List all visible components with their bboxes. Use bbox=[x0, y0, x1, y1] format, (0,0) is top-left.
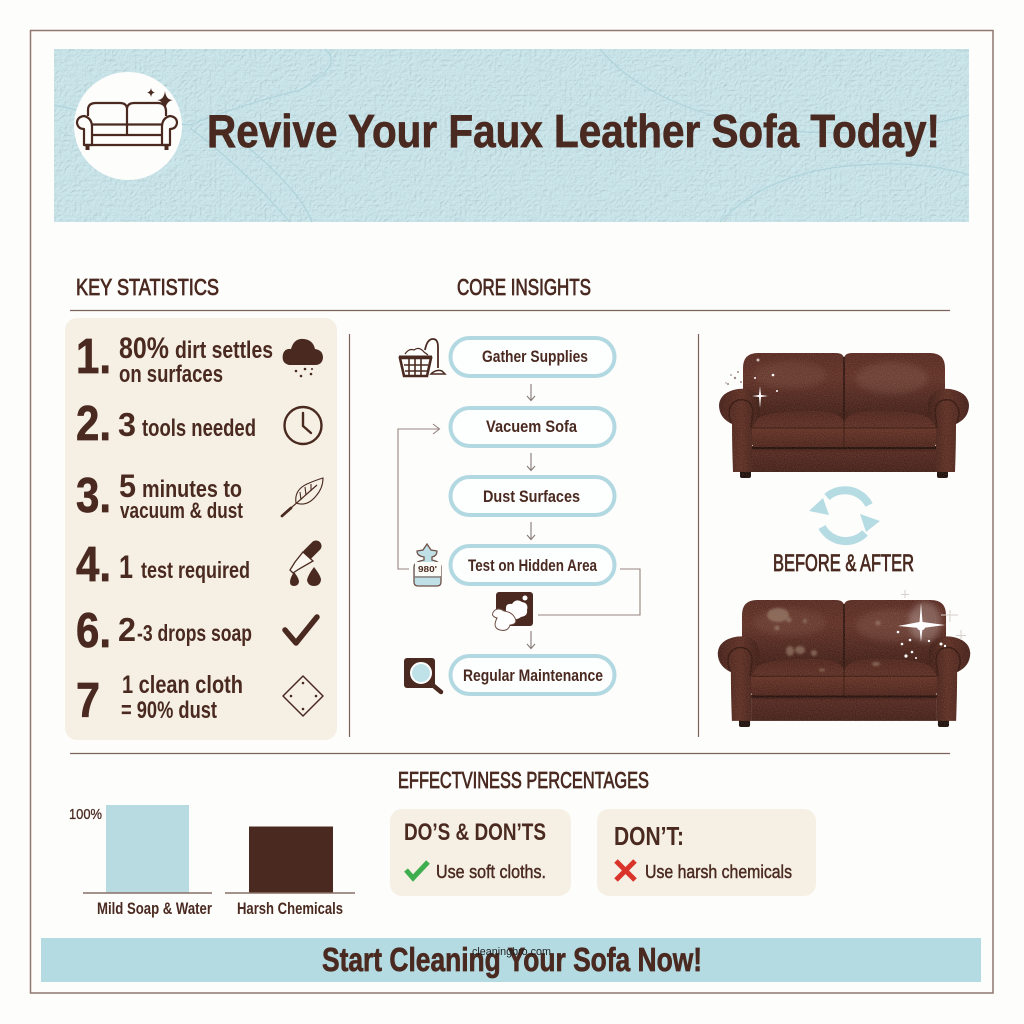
stat 2 bbox=[76, 397, 256, 451]
don't heading: DON’T: bbox=[614, 821, 684, 851]
step: dust surfaces: Dust Surfaces bbox=[483, 487, 580, 506]
panel background bbox=[65, 318, 337, 740]
icon: cleaning cloth bbox=[283, 676, 323, 716]
icon: dust cloud bbox=[283, 339, 323, 377]
icon: red cross bbox=[616, 861, 635, 880]
label: before and after: BEFORE & AFTER bbox=[773, 550, 914, 577]
panel: do's bbox=[390, 809, 571, 896]
heading: core insights: CORE INSIGHTS bbox=[457, 274, 591, 300]
stat 4 bbox=[76, 538, 250, 592]
value label: 100% bbox=[69, 807, 102, 823]
step: gather supplies bbox=[450, 338, 614, 376]
stat 1: 1. bbox=[76, 330, 111, 384]
do's heading: DO’S & DON’TS bbox=[404, 819, 546, 846]
category label: mild soap: Mild Soap & Water bbox=[97, 899, 212, 918]
call to action text: Start Cleaning Your Sofa Now! bbox=[322, 941, 702, 978]
axis lines bbox=[83, 892, 355, 894]
stat 3: 3. bbox=[76, 469, 111, 523]
sparkle dust bbox=[725, 358, 778, 408]
stat 4: 4. bbox=[76, 538, 111, 592]
leather texture band bbox=[54, 49, 969, 222]
stat 3 bbox=[76, 468, 244, 523]
icon: basket and vacuum bbox=[399, 339, 445, 376]
watermark: cleaningbro.com bbox=[472, 946, 551, 958]
icon: soap bottle bbox=[414, 544, 441, 586]
step: test on hidden area bbox=[450, 546, 614, 584]
stat 6: -3 drops soap bbox=[137, 620, 252, 646]
heading: key statistics: KEY STATISTICS bbox=[76, 274, 219, 300]
stat 4: 1 bbox=[119, 549, 133, 585]
panel: key statistics bbox=[65, 318, 337, 740]
icon: sofa with sparkle bbox=[77, 88, 177, 150]
icon: feather bbox=[282, 478, 323, 516]
stat 1 bbox=[76, 330, 273, 388]
icon: magnifying glass bbox=[404, 658, 441, 692]
header banner bbox=[54, 49, 969, 222]
stat 3: 5 bbox=[119, 468, 136, 504]
icon: refresh arrows bbox=[809, 490, 880, 541]
icon: dropper bbox=[290, 546, 321, 586]
stat 7: 7 bbox=[76, 674, 100, 728]
stat 6: 2 bbox=[118, 611, 136, 648]
photo: dusty sofa bbox=[718, 590, 970, 727]
stat 1: dirt settles bbox=[175, 337, 273, 364]
flowchart: core insights bbox=[398, 338, 640, 694]
stat 7 bbox=[76, 671, 243, 728]
title: Revive Your Faux Leather Sofa Today! bbox=[207, 105, 940, 157]
panel: don'ts bbox=[597, 809, 816, 896]
heading: effectiveness percentages: EFFECTVINESS PERCENTAGES bbox=[398, 767, 649, 793]
photo: clean sofa bbox=[719, 353, 969, 478]
stat 2: tools needed bbox=[142, 415, 256, 442]
stat 2: 2. bbox=[76, 397, 111, 451]
feedback loop arrows bbox=[398, 424, 640, 615]
call to action banner bbox=[41, 938, 981, 982]
bar: harsh chemicals bbox=[249, 826, 333, 893]
stat 2: 3 bbox=[118, 406, 136, 443]
step: gather supplies: Gather Supplies bbox=[482, 347, 588, 366]
sparkle bbox=[897, 602, 946, 659]
stat 3: vacuum & dust bbox=[120, 498, 244, 523]
stat 7: = 90% dust bbox=[121, 697, 217, 724]
stat 6: 6. bbox=[76, 604, 111, 658]
icon: clock bbox=[284, 407, 322, 444]
step: test on hidden area: Test on Hidden Area bbox=[468, 556, 597, 575]
do text: Use soft cloths. bbox=[436, 862, 546, 882]
bar chart bbox=[69, 805, 355, 918]
step: vacuum sofa: Vacuem Sofa bbox=[486, 417, 577, 436]
dust stains bbox=[767, 608, 880, 672]
stat 4: test required bbox=[141, 557, 250, 583]
step: regular maintenance bbox=[450, 656, 614, 694]
stat 7: 1 clean cloth bbox=[122, 671, 243, 699]
stat 3: minutes to bbox=[142, 476, 242, 503]
category label: harsh chemicals: Harsh Chemicals bbox=[237, 899, 343, 918]
step: vacuum sofa bbox=[450, 408, 614, 446]
logo circle bbox=[74, 72, 182, 180]
bar: mild soap and water bbox=[106, 805, 189, 893]
stat 1: on surfaces bbox=[119, 361, 223, 388]
leather creases bbox=[54, 49, 969, 222]
stat 6 bbox=[76, 604, 252, 658]
stat 1: 80% bbox=[119, 332, 169, 365]
icon: green check bbox=[406, 862, 428, 878]
icon: check mark bbox=[285, 617, 317, 643]
faint outside sparkles bbox=[901, 590, 966, 640]
icon: soap foam bbox=[493, 592, 533, 630]
don't text: Use harsh chemicals bbox=[645, 862, 792, 882]
step: regular maintenance: Regular Maintenance bbox=[463, 666, 603, 685]
arrows between steps bbox=[527, 384, 535, 648]
icon: soap bottle: 980' bbox=[418, 565, 437, 574]
step: dust surfaces bbox=[450, 477, 614, 515]
